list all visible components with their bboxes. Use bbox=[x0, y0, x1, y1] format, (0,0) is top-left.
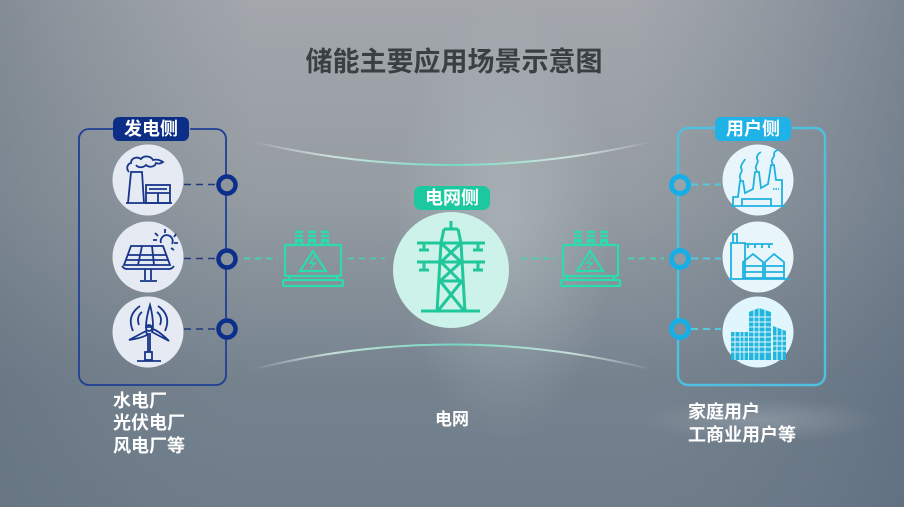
dashes: right transformer to user side bbox=[628, 258, 664, 260]
panel frame bbox=[79, 129, 226, 385]
dashes: grid to right transformer bbox=[521, 258, 556, 260]
text: user list: 家庭用户 bbox=[688, 401, 760, 422]
icon: industrial plant bbox=[722, 222, 794, 292]
arc top bbox=[254, 142, 650, 165]
dashes: transformer to grid bbox=[348, 258, 385, 260]
node 2 bbox=[218, 250, 236, 268]
icon: factory bbox=[722, 144, 794, 216]
icon: solar panel bbox=[112, 222, 184, 292]
node 1 bbox=[672, 176, 688, 194]
icon: wind turbine bbox=[112, 296, 184, 368]
label: 用户侧 bbox=[715, 117, 791, 141]
label: 发电侧 bbox=[113, 117, 189, 141]
panel frame bbox=[678, 128, 825, 385]
icon: right transformer bbox=[561, 232, 620, 286]
text: generation list: 风电厂等 bbox=[113, 435, 185, 456]
text: user list: 工商业用户等 bbox=[688, 424, 796, 445]
title: 储能主要应用场景示意图 bbox=[306, 47, 602, 77]
label: 发电侧: 发电侧 bbox=[124, 118, 178, 139]
node 3 bbox=[672, 320, 688, 338]
icon: office buildings bbox=[722, 296, 794, 368]
text: generation list: 水电厂 bbox=[113, 391, 167, 411]
dashed connectors bbox=[184, 184, 216, 329]
node 3 bbox=[218, 320, 236, 338]
dashes: left to transformer bbox=[244, 258, 278, 260]
icon: transmission tower bbox=[393, 212, 509, 328]
grid side bbox=[393, 186, 509, 328]
label: 电网侧: 电网侧 bbox=[425, 188, 479, 208]
arc bottom bbox=[254, 344, 650, 369]
text: generation list bbox=[113, 391, 185, 456]
panel: user side bbox=[672, 117, 825, 385]
panel: generation side bbox=[79, 117, 236, 385]
label: 电网侧 bbox=[414, 186, 490, 210]
text: user list bbox=[688, 401, 796, 445]
node 2 bbox=[672, 250, 688, 268]
label: 用户侧: 用户侧 bbox=[726, 118, 780, 139]
icon: power plant bbox=[112, 144, 184, 216]
text: generation list: 光伏电厂 bbox=[113, 412, 185, 433]
node 1 bbox=[218, 176, 236, 194]
dashed connectors bbox=[691, 184, 721, 329]
text: grid: 电网 bbox=[435, 410, 469, 429]
icon: left transformer bbox=[283, 232, 343, 286]
